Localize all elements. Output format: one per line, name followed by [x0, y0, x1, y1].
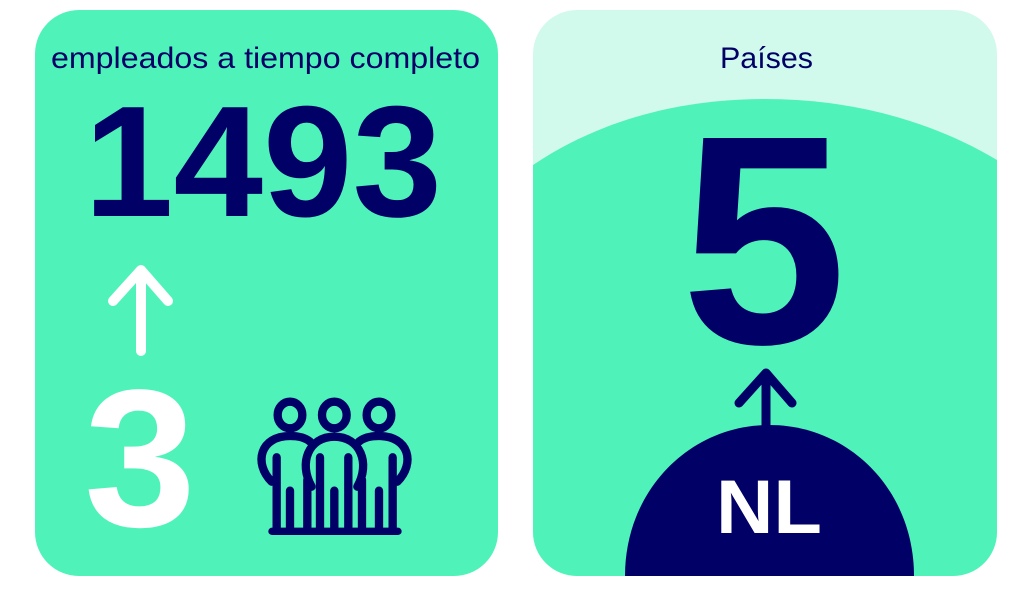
heading: countries: Países — [720, 42, 813, 75]
number: 3: 3 — [84, 349, 196, 568]
panel: employees — [35, 10, 498, 576]
icon: three people — [261, 402, 407, 531]
arrow: white up — [113, 270, 168, 351]
panel: countries — [533, 10, 997, 576]
heading: employees: empleados a tiempo completo — [51, 42, 480, 75]
arrow: navy up — [739, 373, 792, 428]
number: 1493: 1493 — [84, 74, 442, 250]
mound: NL — [625, 425, 914, 576]
arc: green background — [533, 99, 997, 576]
label: NL: NL — [716, 465, 822, 550]
number: 5: 5 — [681, 74, 847, 407]
